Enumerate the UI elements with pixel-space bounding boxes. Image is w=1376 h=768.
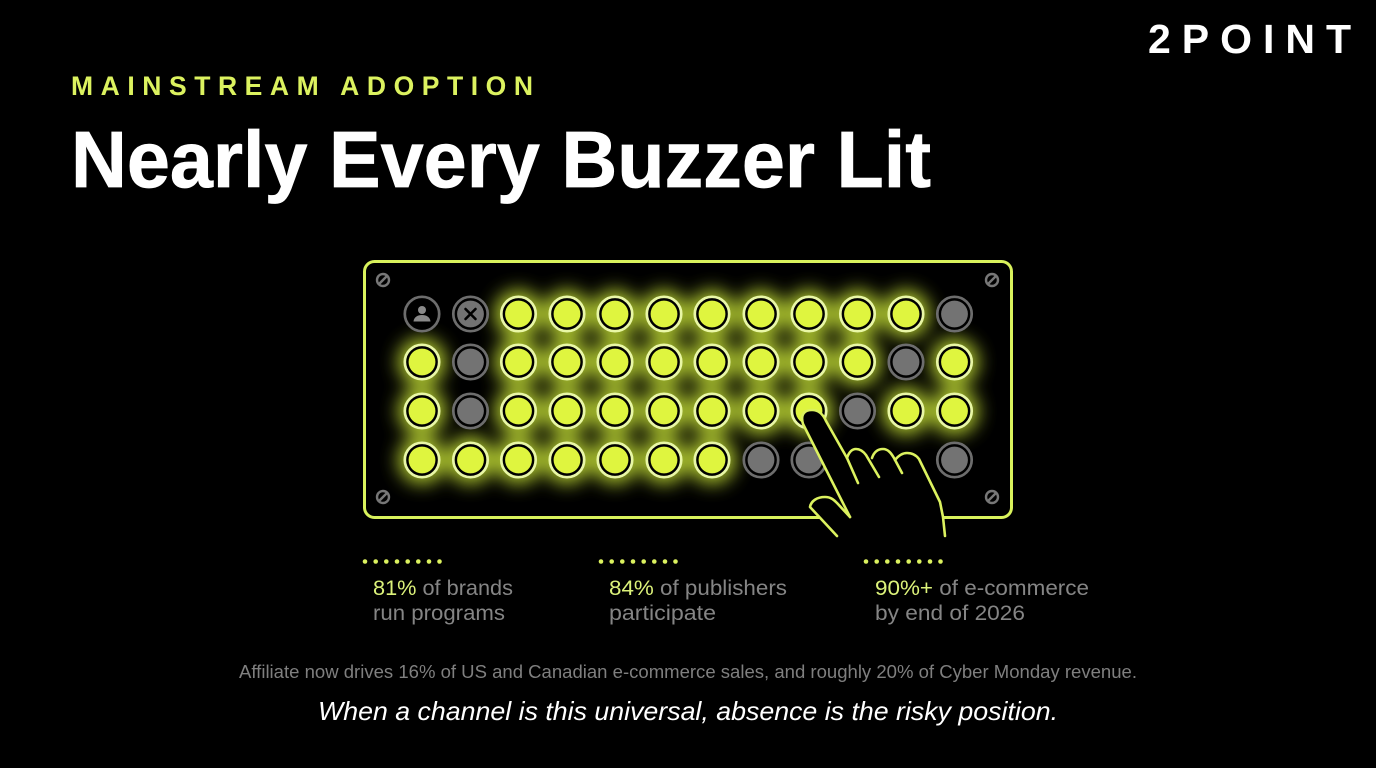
stat text: 81% of brands <box>373 576 513 600</box>
row 3 <box>405 394 972 428</box>
dotted rule <box>363 559 442 564</box>
stat text: participate <box>609 601 716 625</box>
row 1 <box>501 297 972 331</box>
stat text <box>609 576 787 625</box>
buzzer grid <box>405 297 972 477</box>
stat text: run programs <box>373 601 505 625</box>
icon: crossed-out buzzer <box>453 297 488 331</box>
glow behind lit buzzers <box>398 290 978 484</box>
stat text <box>875 576 1089 625</box>
stat text <box>373 576 513 625</box>
supporting sentence: Affiliate now drives 16% of US and Canadian e-commerce sales, and roughly 20% of Cyber Monday revenue. <box>239 662 1137 682</box>
stat: brands <box>363 559 513 625</box>
stat: publishers <box>599 559 787 625</box>
board frame <box>364 262 1012 518</box>
icon: pointing hand <box>802 410 945 536</box>
logo: 2POINT: 2POINT <box>1148 16 1351 62</box>
stat: e-commerce <box>864 559 1089 625</box>
corner screws <box>377 274 998 503</box>
row 4 <box>405 443 972 477</box>
closing statement: When a channel is this universal, absence is the risky position. <box>318 696 1058 726</box>
stat text: 84% of publishers <box>609 576 787 600</box>
dotted rule <box>864 559 943 564</box>
eyebrow heading: MAINSTREAM ADOPTION <box>71 71 533 101</box>
icon: person buzzer <box>405 297 439 331</box>
panel: buzzer board <box>364 262 1012 518</box>
stat text: 90%+ of e-commerce <box>875 576 1089 600</box>
dotted rule <box>599 559 678 564</box>
stat text: by end of 2026 <box>875 601 1025 625</box>
title: Nearly Every Buzzer Lit <box>71 115 931 204</box>
row 2 <box>405 345 972 379</box>
